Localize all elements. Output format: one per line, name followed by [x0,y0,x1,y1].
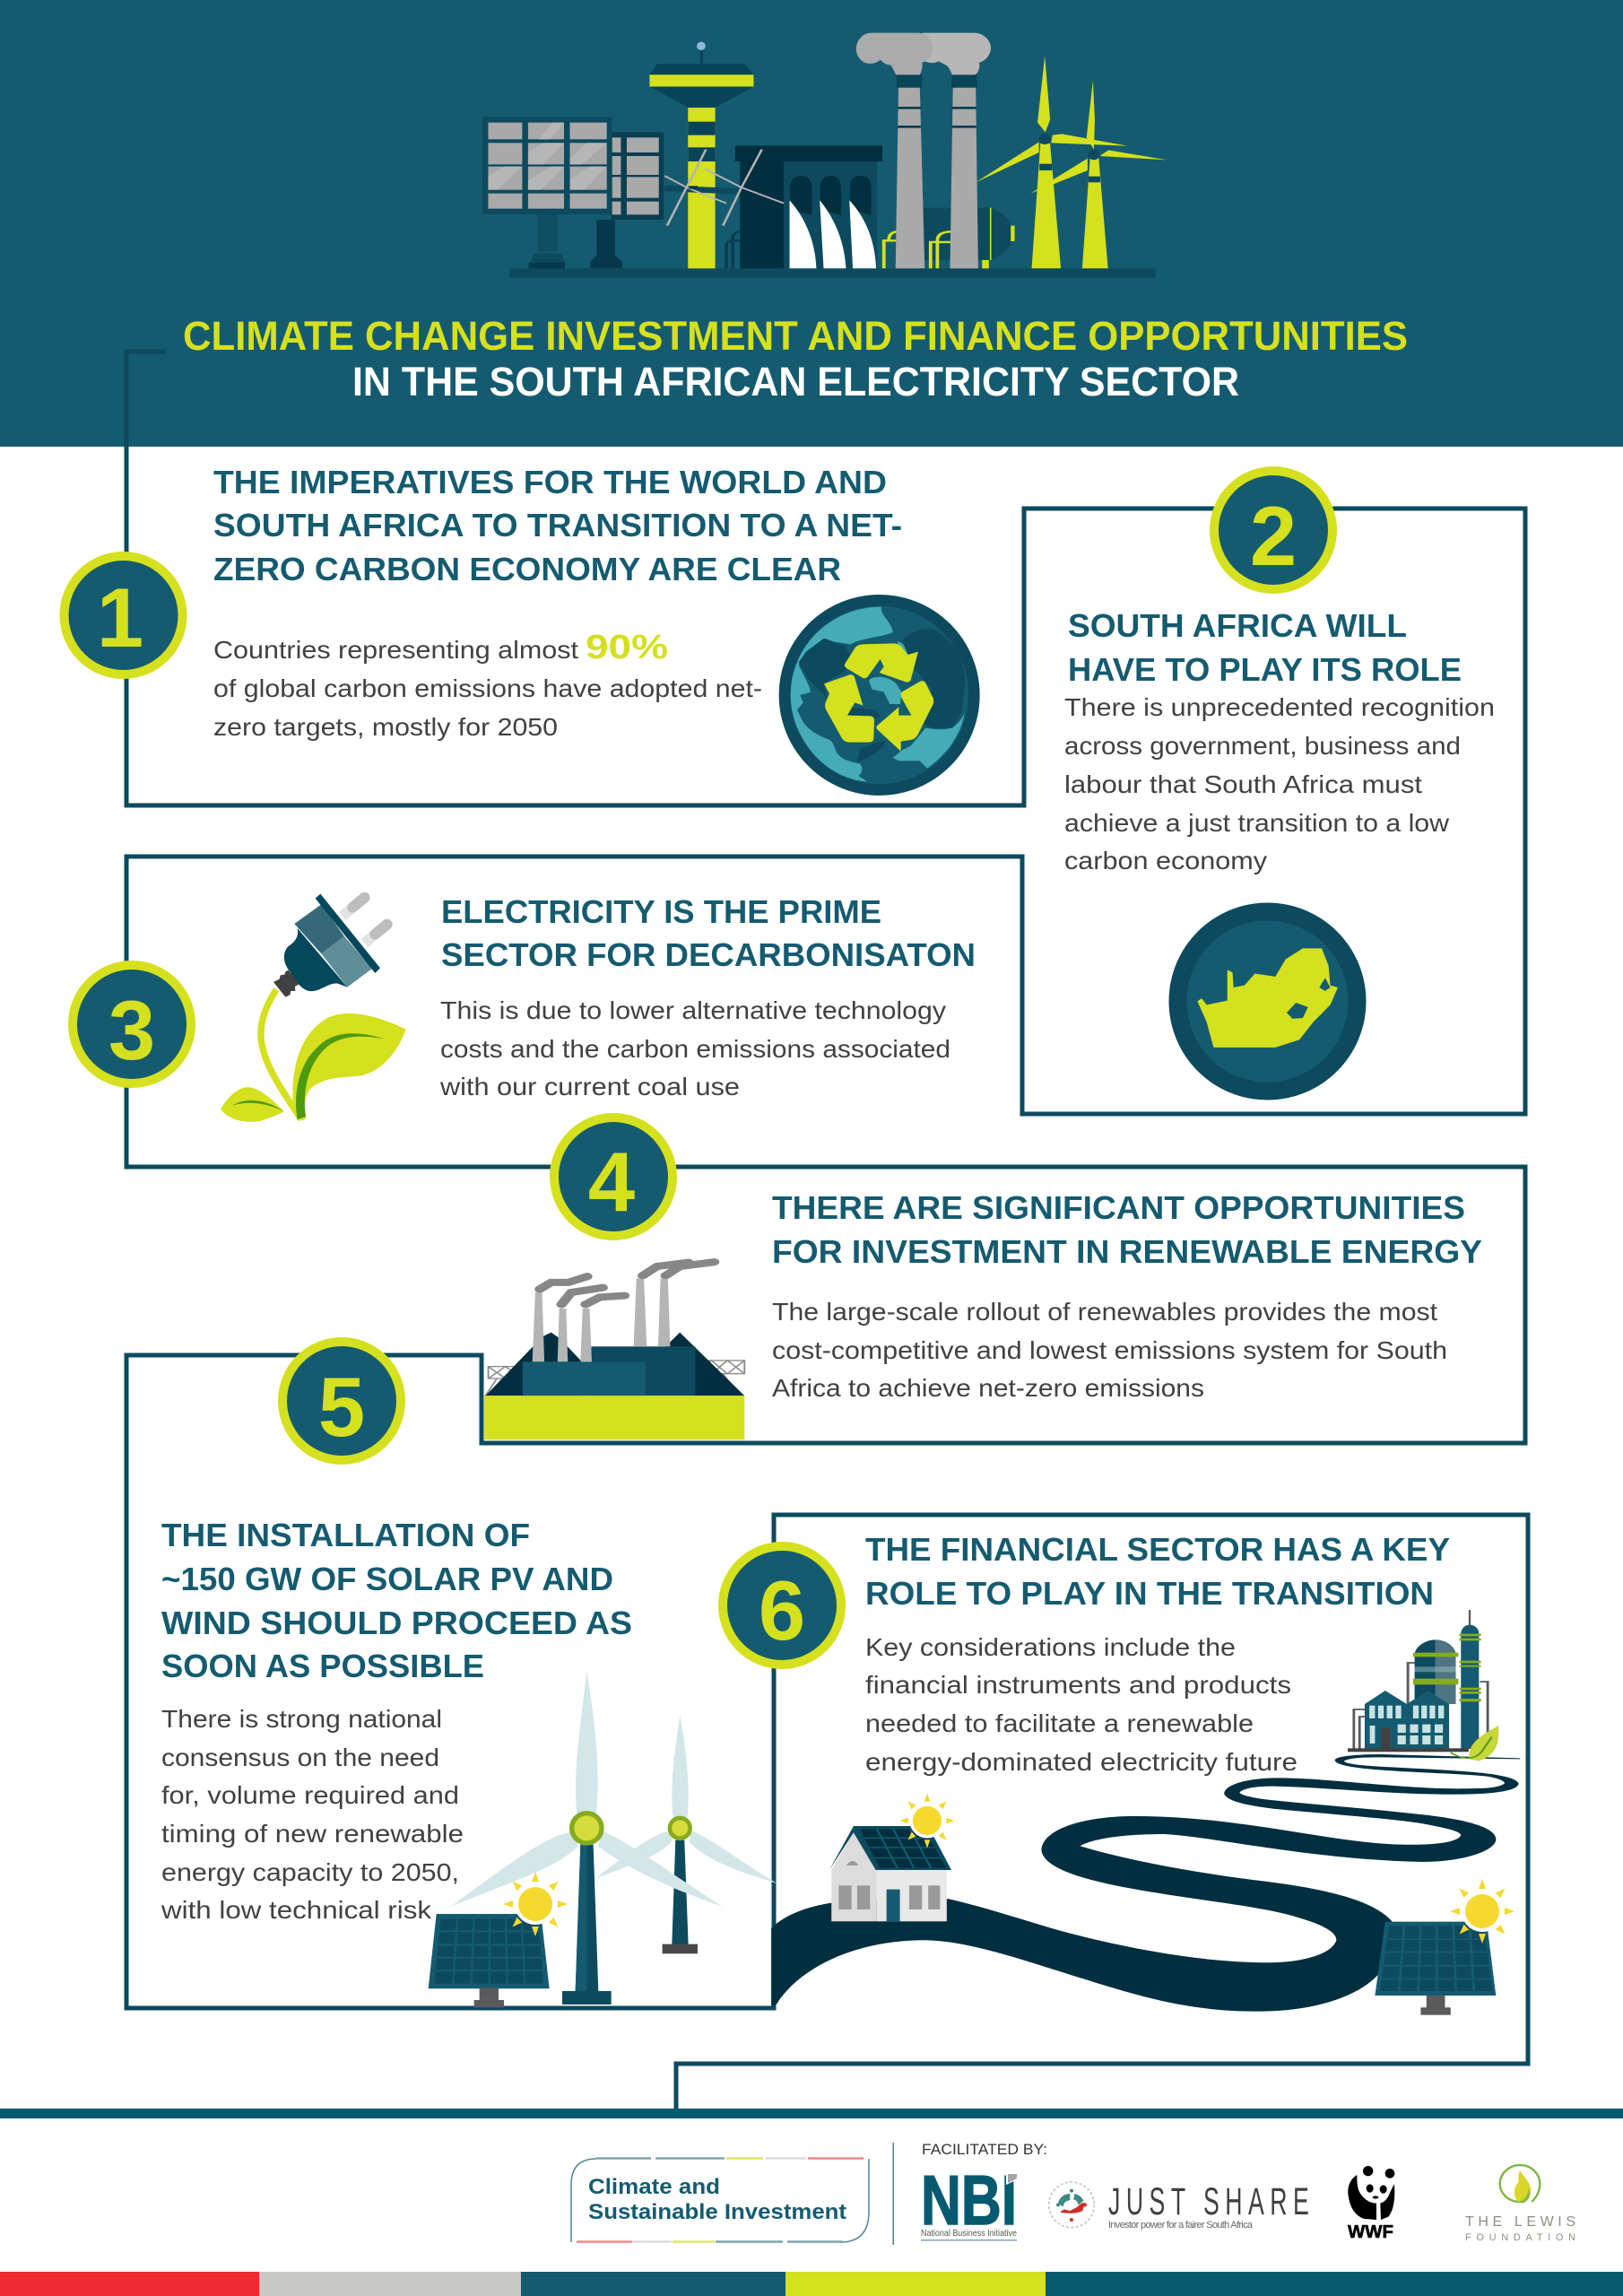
logo: WWF [1348,2166,1394,2242]
panel 6 outline [676,1515,1528,2109]
logo: NBI: National Business Initiative [921,2228,1017,2239]
panel 5 body text: consensus on the need [161,1744,439,1771]
panel 2 body text: There is unprecedented recognition [1064,693,1495,721]
panel 4 heading: FOR INVESTMENT IN RENEWABLE ENERGY [772,1233,1482,1270]
panel 1 body text: zero targets, mostly for 2050 [213,713,558,741]
panel 6 body text [865,1633,1298,1776]
badge 4 [554,1118,673,1236]
panel 4: renewable opportunities [482,1118,1525,1443]
panel 5 heading: SOON AS POSSIBLE [161,1648,484,1684]
badge 6 [723,1546,841,1665]
icon: plug and leaves [221,894,406,1122]
panel 5 body text [161,1705,464,1924]
badge 3 [73,965,191,1083]
logo: NBI: NBI [921,2161,1017,2239]
icon: recycling globe [785,600,974,790]
panel 5 body text: for, volume required and [161,1781,459,1809]
logo: Climate and Sustainable Investment: Climate and [588,2175,720,2199]
title: IN THE SOUTH AFRICAN ELECTRICITY SECTOR [352,359,1239,404]
panel 3 heading: ELECTRICITY IS THE PRIME [441,893,881,930]
panel 3 outline [126,857,1525,1167]
panel 2 heading: SOUTH AFRICA WILL [1068,607,1407,644]
panel 1 heading: SOUTH AFRICA TO TRANSITION TO A NET- [213,507,902,544]
badge 3: 3 [108,983,155,1077]
panel 2 heading [1068,607,1462,688]
title [183,313,1408,404]
panel 2 heading: HAVE TO PLAY ITS ROLE [1068,651,1462,688]
badge 1: 1 [97,570,143,665]
logo: Just Share [1049,2180,1309,2231]
footer logos [571,2141,1575,2245]
logo: Climate and Sustainable Investment: Sustainable Investment [588,2200,846,2224]
panel 4 heading [772,1189,1482,1270]
panel 4 body text: cost-competitive and lowest emissions system for South [772,1336,1447,1364]
panel 6 heading: ROLE TO PLAY IN THE TRANSITION [865,1575,1434,1612]
panel 6 heading [865,1531,1450,1612]
panel 6 heading: THE FINANCIAL SECTOR HAS A KEY [865,1531,1450,1568]
badge 5 [282,1342,401,1460]
panel 4 body text: The large-scale rollout of renewables provides the most [772,1298,1437,1326]
panel 2 body text: labour that South Africa must [1064,770,1422,798]
panel 1: imperatives [65,352,1024,805]
panel 1 heading: ZERO CARBON ECONOMY ARE CLEAR [213,551,841,587]
panel 1 body text: Countries representing almost [213,636,578,664]
logo: Just Share: Investor power for a fairer South Africa [1108,2220,1254,2231]
panel 2 body text [1064,693,1495,874]
panel 6 body text: energy-dominated electricity future [865,1748,1298,1776]
icon: sun on solar panel [1450,1879,1515,1944]
panel 5 heading [161,1517,632,1684]
panel 6 body text: Key considerations include the [865,1633,1236,1661]
panel 2 body text: carbon economy [1064,847,1267,874]
city skyline [1348,1610,1498,1761]
panel 5 body text: There is strong national [161,1705,442,1733]
panel 6 body text: needed to facilitate a renewable [865,1709,1254,1737]
panel 5 heading: ~150 GW OF SOLAR PV AND [161,1561,613,1597]
panel 5 body text: with low technical risk [161,1896,432,1924]
header band [0,0,1623,447]
panel 6 body text: financial instruments and products [865,1671,1291,1699]
panel 5 heading: WIND SHOULD PROCEED AS [161,1605,632,1641]
panel 3 body text: with our current coal use [439,1073,740,1100]
solar panel [1375,1922,1496,2015]
panel 1 body text [213,629,762,741]
footer rule [0,2109,1623,2118]
panel 4 outline [482,1167,1525,1443]
panel 2 body text: achieve a just transition to a low [1064,809,1450,837]
panel 1 outline [126,352,1024,805]
illustration: winding road, house, city and solar panel [771,1610,1520,2015]
panel 4 heading: THERE ARE SIGNIFICANT OPPORTUNITIES [772,1189,1465,1226]
panel 3: electricity [73,857,1525,1167]
badge 1 [65,556,183,674]
panel 5 body text: timing of new renewable [161,1820,464,1848]
panel 1 heading: THE IMPERATIVES FOR THE WORLD AND [213,464,887,500]
logo: The Lewis Foundation: FOUNDATION [1465,2232,1575,2243]
house [829,1826,951,1921]
badge 4: 4 [588,1135,635,1229]
badge 6: 6 [759,1563,805,1657]
panel 6: financial sector [676,1515,1528,2109]
panel 3 heading: SECTOR FOR DECARBONISATON [441,936,976,973]
road [771,1754,1520,2012]
panel 3 body text [439,996,950,1100]
icon: wind turbines and solar panel [429,1671,777,2007]
logo: The Lewis Foundation [1465,2165,1575,2243]
panel 1 body text: 90% [586,629,668,666]
bottom colour strip [0,2272,1623,2296]
panel 5: solar and wind installation [126,1342,777,2008]
icon: energy skyline [482,33,1167,278]
facilitated by label: FACILITATED BY: [922,2141,1047,2158]
panel 4 body text: Africa to achieve net-zero emissions [772,1374,1204,1402]
icon: sun on house [899,1793,955,1848]
panel 1 body text: of global carbon emissions have adopted net- [213,674,762,702]
panel 5 outline [126,1355,774,2008]
badge 2: 2 [1250,489,1297,583]
title: CLIMATE CHANGE INVESTMENT AND FINANCE OPPORTUNITIES [183,313,1408,359]
panel 5 body text: energy capacity to 2050, [161,1858,459,1886]
panel 2: South Africa's role [1022,471,1525,1114]
logo: WWF: WWF [1348,2222,1393,2242]
panel 2 body text: across government, business and [1064,732,1461,760]
panel 3 body text: This is due to lower alternative technology [440,996,946,1024]
logo: Just Share: JUST SHARE [1108,2180,1309,2223]
panel 3 body text: costs and the carbon emissions associated [440,1035,950,1063]
logo: Climate and Sustainable Investment [571,2158,869,2242]
icon: South Africa map [1169,902,1367,1100]
icon: sun [503,1872,568,1936]
panel 4 body text [772,1298,1447,1402]
panel 2 outline [1022,509,1525,1114]
icon: factory [484,1262,744,1439]
panel 1 heading [213,464,902,587]
panel 3 heading [441,893,976,973]
badge 2 [1214,471,1332,589]
badge 5: 5 [318,1360,365,1454]
panel 5 heading: THE INSTALLATION OF [161,1517,530,1553]
logo: The Lewis Foundation: THE LEWIS [1465,2214,1575,2230]
